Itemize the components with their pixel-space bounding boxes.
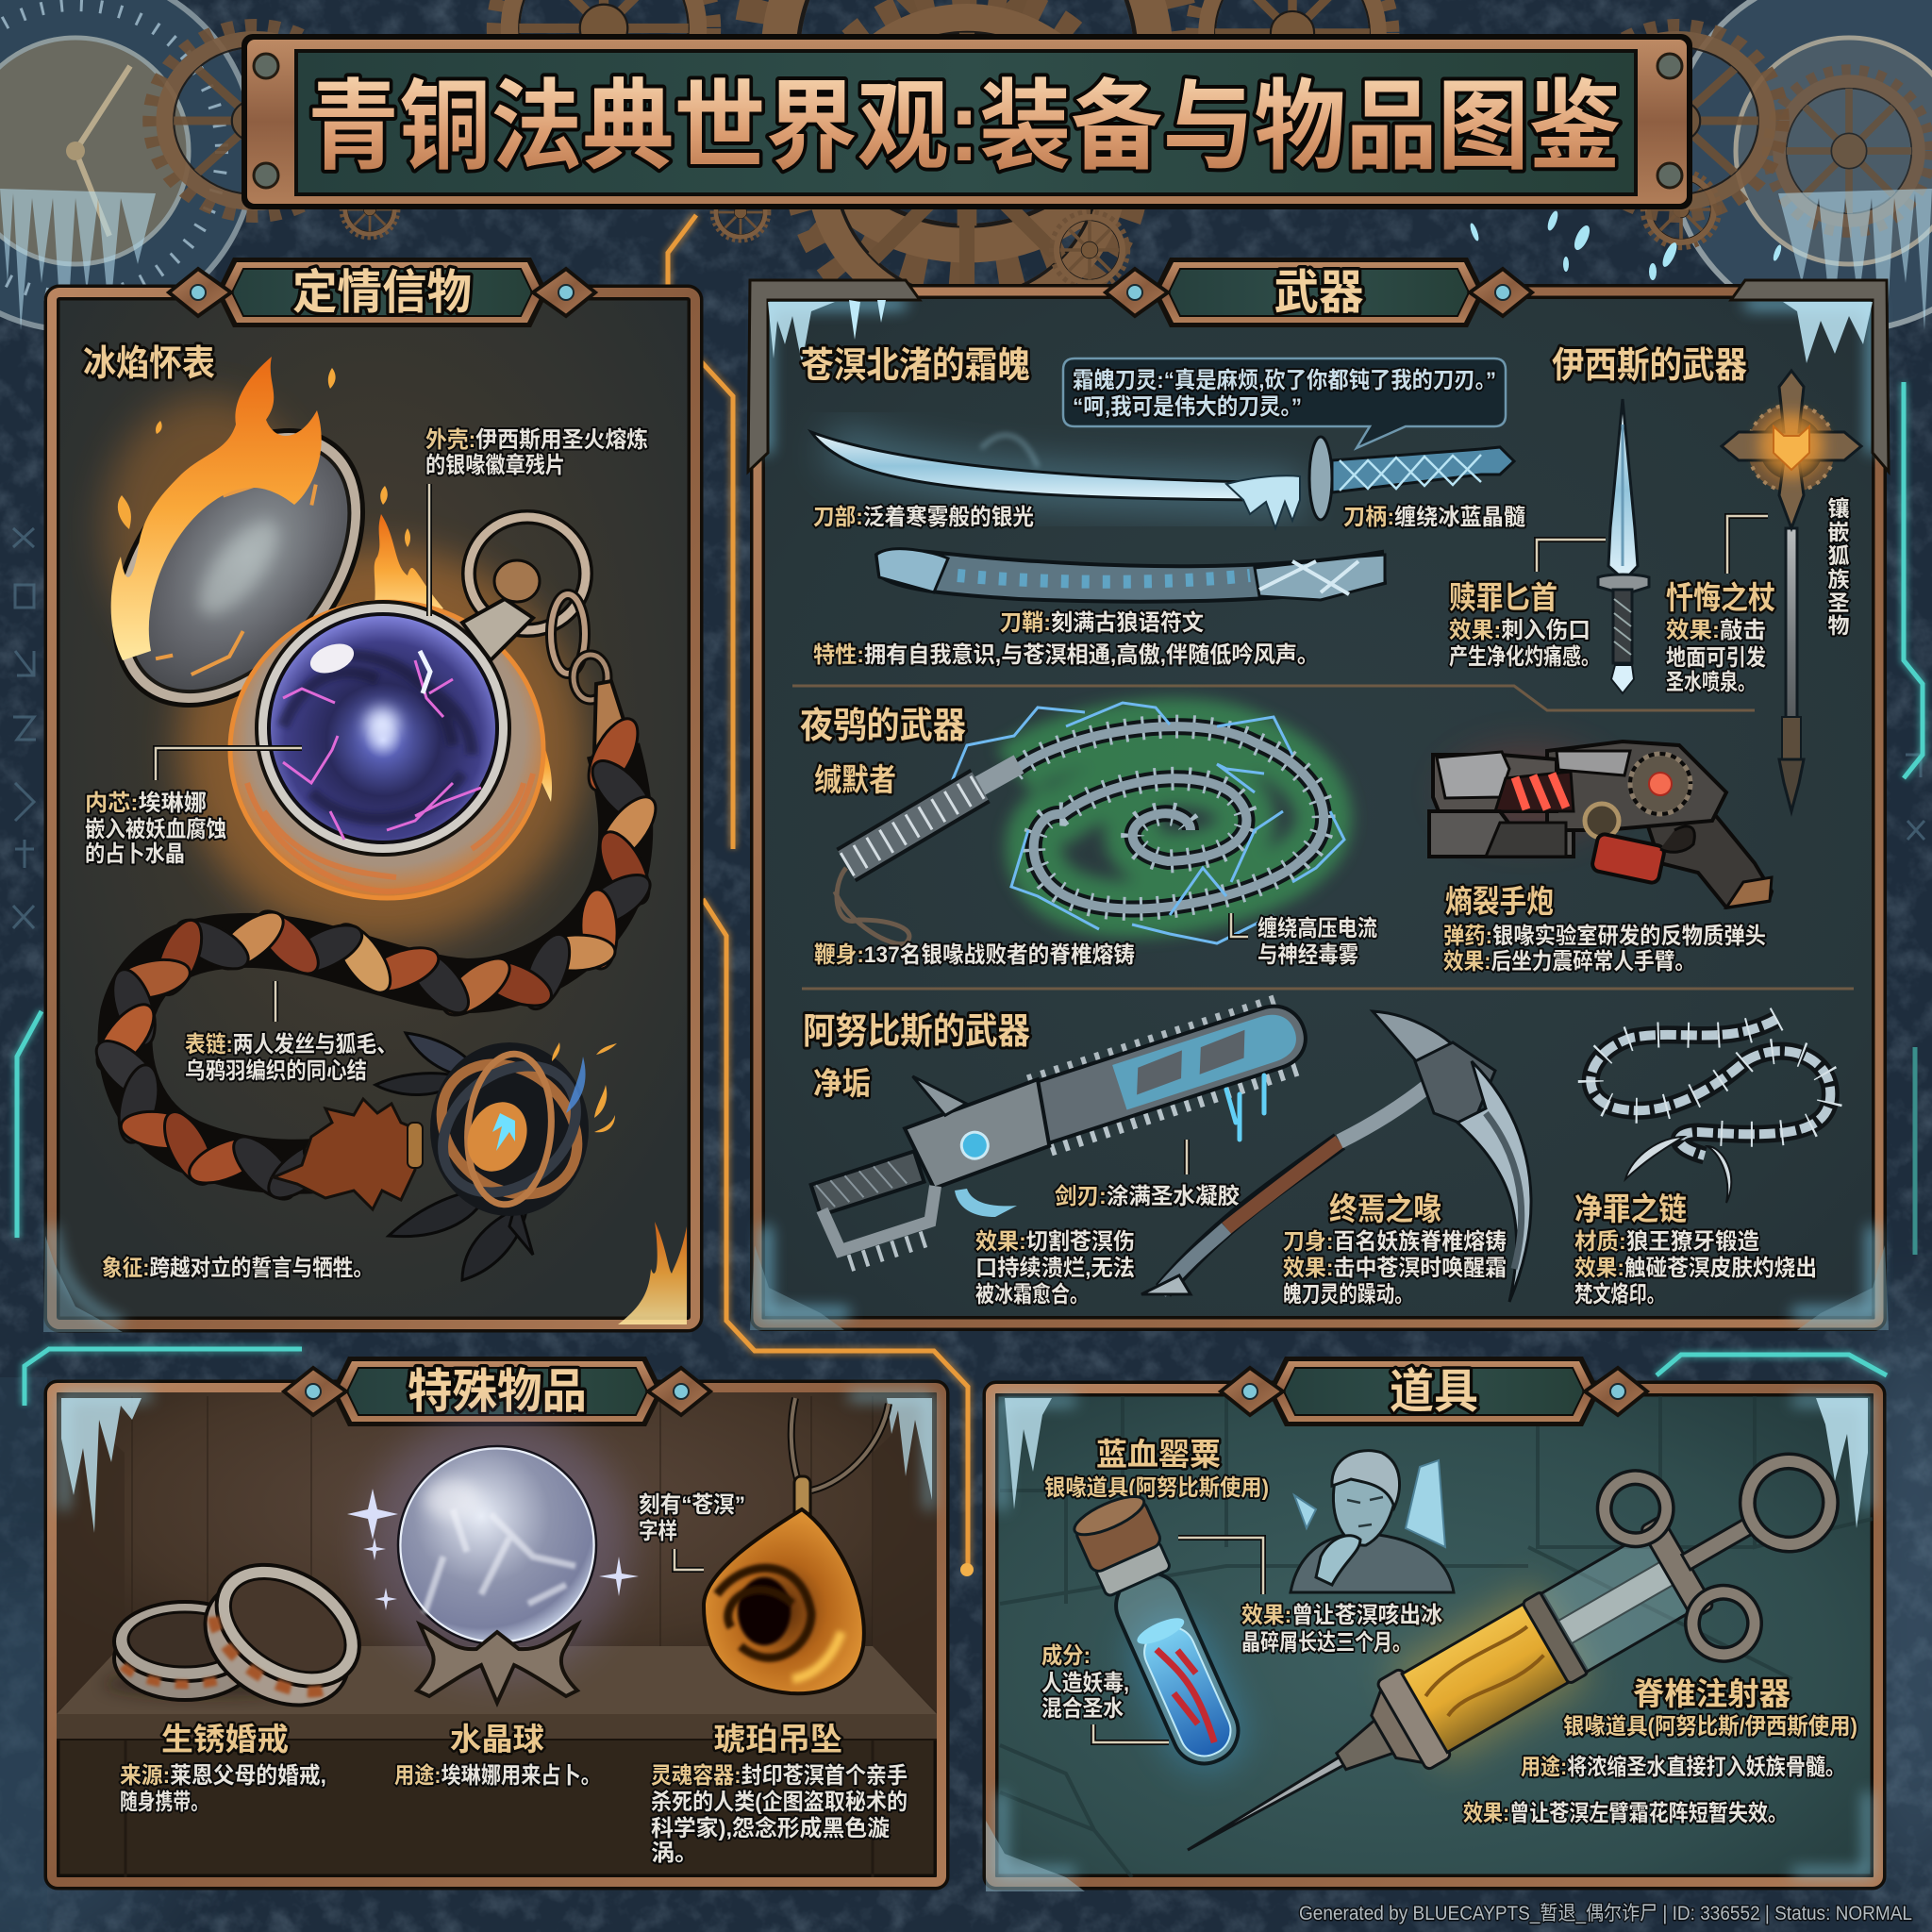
- section ribbon: [1221, 1357, 1647, 1426]
- icon: love knot: [408, 1037, 604, 1222]
- icon: vial: [1070, 1489, 1255, 1781]
- icon: crystal ball: [347, 1415, 639, 1703]
- dividers: [792, 686, 1854, 989]
- item text: 琥珀吊坠: 科学家),怨念形成黑色漩: [651, 1815, 890, 1841]
- callout: 终焉之喙: 刀身:百名妖族脊椎熔铸: [1283, 1229, 1507, 1255]
- callout: 刻有苍溟字样: [639, 1492, 745, 1570]
- icon: clock left: [0, 0, 255, 330]
- callout: 净罪之链: [1574, 1191, 1817, 1307]
- callout: 净罪之链: 净罪之链: [1574, 1191, 1687, 1226]
- callout: 表链: [185, 981, 397, 1084]
- callout: 终焉之喙: 终焉之喙: [1329, 1191, 1441, 1226]
- item text: 琥珀吊坠: 琥珀吊坠: [713, 1722, 842, 1757]
- icon: watch crown and chain: [462, 517, 630, 753]
- callout: 赎罪匕首: [1449, 540, 1606, 670]
- callout: 净罪之链: 梵文烙印。: [1574, 1281, 1665, 1307]
- heading: 蓝血罂粟: 蓝血罂粟: [1096, 1437, 1221, 1472]
- callout: 脊椎注射器: [1463, 1676, 1857, 1826]
- callout: 外壳: [425, 427, 648, 616]
- subheading: 缄默者: 缄默者: [814, 762, 896, 797]
- callout: 脊椎注射器: 银喙道具(阿努比斯/伊西斯使用): [1563, 1714, 1857, 1740]
- callout: speech bubble: [1063, 358, 1506, 448]
- labels: katana parts: [813, 504, 1525, 668]
- icon: watch lid: [64, 384, 413, 752]
- callout: 净罪之链: 材质:狼王獠牙锻造: [1574, 1229, 1759, 1255]
- frost corners: [986, 1398, 1868, 1891]
- callout: speech bubble: “呵,我可是伟大的刀灵。”: [1073, 394, 1302, 420]
- icon: raven feathers: [375, 1033, 533, 1280]
- section ribbon: 特殊物品: [408, 1365, 587, 1418]
- icon: clock right: [1670, 0, 1932, 330]
- icon: entropy hand cannon: [1429, 741, 1772, 908]
- callout: 脊椎注射器: 用途:将浓缩圣水直接打入妖族骨髓。: [1521, 1754, 1845, 1780]
- section ribbon: 定情信物: [292, 266, 472, 319]
- icon: staff: [1722, 371, 1861, 811]
- item text: 生锈婚戒: 随身携带。: [120, 1790, 208, 1815]
- callout: 效果: 晶碎屑长达三个月。: [1241, 1630, 1411, 1656]
- callout: 效果: 效果:曾让苍溟咳出冰: [1241, 1603, 1442, 1628]
- callout: 净罪之链: 效果:触碰苍溟皮肤灼烧出: [1574, 1256, 1817, 1281]
- text: 象征: 象征:跨越对立的誓言与牺牲。: [102, 1256, 374, 1281]
- callout: 净垢 labels: [975, 1140, 1240, 1307]
- callout: 净垢 labels: 被冰霜愈合。: [975, 1281, 1089, 1307]
- frost corners: [748, 280, 1889, 1330]
- labels: katana parts: 特性:拥有自我意识,与苍溟相通,高傲,伴随低吟风声。: [813, 641, 1319, 668]
- icon: whip: [835, 703, 1344, 944]
- panel: 定情信物: [43, 258, 695, 1332]
- callout: 脊椎注射器: 效果:曾让苍溟左臂霜花阵短暂失效。: [1463, 1801, 1788, 1826]
- icicles top corners: [0, 189, 1932, 396]
- callout: 赎罪匕首: 产生净化灼痛感。: [1449, 643, 1600, 670]
- vertical label: 镶嵌狐族圣物: 物: [1828, 613, 1849, 638]
- callout: 熵裂手炮: 弹药:银喙实验室研发的反物质弹头: [1443, 923, 1766, 949]
- section ribbon: 武器: [1274, 266, 1364, 319]
- icon: amber pendant: [704, 1398, 889, 1693]
- flames on lid rim: [111, 357, 322, 660]
- callout: 刻有苍溟字样: 字样: [639, 1519, 677, 1544]
- runes left edge: [13, 528, 1924, 928]
- callout: 成分: 成分:: [1041, 1643, 1091, 1669]
- heading: 伊西斯的武器: 伊西斯的武器: [1552, 346, 1747, 386]
- callout: 刻有苍溟字样: 刻有“苍溟”: [639, 1492, 745, 1518]
- callout: 赎罪匕首: 赎罪匕首: [1449, 580, 1557, 615]
- heading: 冰焰怀表: 冰焰怀表: [83, 344, 215, 384]
- heading: 蓝血罂粟: [1044, 1437, 1269, 1501]
- item text: 生锈婚戒: [120, 1722, 326, 1815]
- icon: katana: [811, 432, 1514, 528]
- callout: 脊椎注射器: 脊椎注射器: [1633, 1676, 1790, 1711]
- icon: thorn chain: [1591, 1019, 1830, 1203]
- ice fragments: [1469, 209, 1783, 280]
- callout: 终焉之喙: 魄刀灵的躁动。: [1283, 1282, 1413, 1307]
- callout: 内芯: [85, 748, 302, 867]
- vertical label: 镶嵌狐族圣物: 嵌: [1828, 520, 1849, 544]
- callout: 内芯: 的占卜水晶: [85, 841, 185, 867]
- frost corners: [61, 1396, 932, 1533]
- callout: 终焉之喙: [1283, 1191, 1507, 1307]
- callout: 终焉之喙: 效果:击中苍溟时唤醒霜: [1283, 1256, 1507, 1281]
- item text: 水晶球: 水晶球: [450, 1722, 544, 1757]
- panel: 特殊物品: [52, 1357, 941, 1882]
- panel: 道具: [986, 1357, 1878, 1932]
- callout: 熵裂手炮: [1443, 884, 1766, 974]
- icon: scabbard: [876, 549, 1385, 602]
- vertical label: 镶嵌狐族圣物: 族: [1828, 567, 1849, 591]
- callout: 忏悔之杖: 效果:敲击: [1666, 618, 1766, 643]
- item text: 水晶球: 用途:埃琳娜用来占卜。: [394, 1762, 601, 1789]
- circuit lines orange: [668, 215, 974, 1576]
- item text: 琥珀吊坠: 杀死的人类(企图盗取秘术的: [651, 1790, 908, 1815]
- callout: 表链: 表链:两人发丝与狐毛、: [185, 1032, 397, 1058]
- item text: 琥珀吊坠: 灵魂容器:封印苍溟首个亲手: [651, 1763, 908, 1789]
- heading: 蓝血罂粟: 银喙道具(阿努比斯使用): [1044, 1475, 1269, 1501]
- callout: 净垢 labels: 剑刃:涂满圣水凝胶: [1055, 1183, 1240, 1209]
- icon: chainsaw sword: [789, 957, 1329, 1267]
- icon: gears behind title: [341, 0, 1719, 335]
- callout: 表链: 乌鸦羽编织的同心结: [185, 1058, 367, 1084]
- callout: 外壳: 外壳:伊西斯用圣火熔炼: [425, 427, 648, 453]
- section ribbon: [1106, 258, 1532, 327]
- icon: watch case and crystal: [230, 602, 543, 898]
- section ribbon: [284, 1357, 710, 1426]
- callout: 内芯: 嵌入被妖血腐蚀: [85, 817, 226, 842]
- flame glow: [104, 368, 585, 943]
- flames bottom right corner: [618, 1222, 687, 1324]
- circuit lines teal: [17, 382, 1923, 1406]
- labels: katana parts: 刀柄:缠绕冰蓝晶髓: [1343, 504, 1525, 530]
- callout: 成分: 人造妖毒,: [1041, 1671, 1129, 1696]
- callout: 缠绕高压电流: [1231, 913, 1377, 968]
- callout: 净垢 labels: 口持续溃烂,无法: [975, 1256, 1135, 1281]
- callout: 熵裂手炮: 熵裂手炮: [1445, 884, 1554, 919]
- title text: 青铜法典世界观:装备与物品图鉴: [308, 73, 1621, 182]
- icon: fox fur tuft: [274, 1099, 415, 1209]
- heading: 阿努比斯的武器: 阿努比斯的武器: [803, 1012, 1030, 1052]
- callout: 忏悔之杖: 圣水喷泉。: [1666, 670, 1756, 695]
- lab background: [1000, 1396, 1873, 1877]
- callout: speech bubble: 霜魄刀灵:“真是麻烦,砍了你都钝了我的刀刃。”: [1073, 368, 1496, 393]
- icon: braided chain: [87, 711, 666, 1208]
- icon: rusty rings: [104, 1540, 381, 1731]
- callout: 忏悔之杖: 忏悔之杖: [1666, 580, 1775, 615]
- callout: 净垢 labels: 效果:切割苍溟伤: [975, 1229, 1135, 1255]
- callout: 内芯: 内芯:埃琳娜: [85, 791, 207, 816]
- icon: spine syringe: [1136, 1393, 1876, 1932]
- subheading: 净垢: 净垢: [813, 1066, 871, 1101]
- heading: 苍溟北渚的霜魄: 苍溟北渚的霜魄: [801, 346, 1030, 386]
- callout: 赎罪匕首: 效果:刺入伤口: [1449, 618, 1591, 643]
- item text: 生锈婚戒: 生锈婚戒: [161, 1722, 289, 1757]
- callout: 效果: [1178, 1538, 1442, 1656]
- callout: 忏悔之杖: [1666, 516, 1775, 695]
- labels: katana parts: 刀鞘:刻满古狼语符文: [1000, 609, 1204, 636]
- callout: 缠绕高压电流: 与神经毒雾: [1257, 942, 1358, 968]
- frost bottom left corner: [43, 1226, 123, 1332]
- vertical label: 镶嵌狐族圣物: 圣: [1828, 591, 1849, 615]
- text: 鞭身: 鞭身:137名银喙战败者的脊椎熔铸: [814, 942, 1135, 968]
- item text: 水晶球: [394, 1722, 601, 1789]
- shelf: [57, 1392, 937, 1877]
- callout: 忏悔之杖: 地面可引发: [1666, 645, 1766, 671]
- panel: 武器: [748, 258, 1889, 1330]
- callout: 成分: [1041, 1643, 1169, 1742]
- section ribbon: 道具: [1390, 1365, 1478, 1418]
- callout: 熵裂手炮: 效果:后坐力震碎常人手臂。: [1443, 949, 1695, 974]
- vertical label: 镶嵌狐族圣物: 镶: [1828, 496, 1849, 521]
- callout: 缠绕高压电流: 缠绕高压电流: [1257, 915, 1377, 941]
- item text: 生锈婚戒: 来源:莱恩父母的婚戒,: [120, 1763, 326, 1789]
- icon: dagger: [1598, 399, 1649, 693]
- vertical label: 镶嵌狐族圣物: 狐: [1828, 543, 1849, 568]
- icon: coughing man: [1291, 1451, 1454, 1592]
- item text: 琥珀吊坠: [651, 1722, 908, 1866]
- icon: scythe: [1141, 1011, 1531, 1302]
- title plate: [151, 26, 1781, 215]
- section ribbon: [169, 258, 595, 327]
- callout: 外壳: 的银喙徽章残片: [425, 452, 565, 478]
- sparks near knot: [552, 1042, 617, 1132]
- callout: 成分: 混合圣水: [1041, 1696, 1124, 1722]
- heading: 夜鸮的武器: 夜鸮的武器: [800, 707, 966, 746]
- labels: katana parts: 刀部:泛着寒雾般的银光: [813, 504, 1034, 530]
- item text: 琥珀吊坠: 涡。: [651, 1840, 698, 1866]
